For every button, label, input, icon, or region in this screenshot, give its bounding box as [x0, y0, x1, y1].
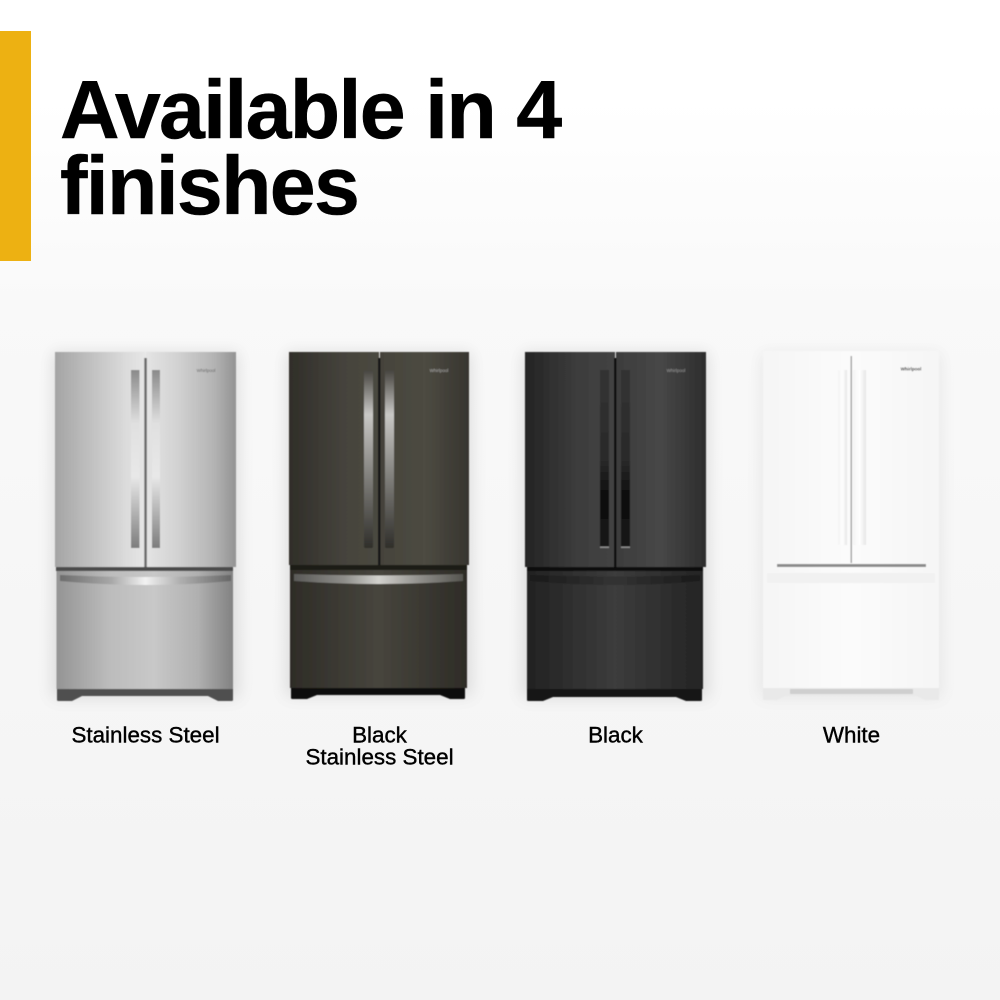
base feet — [291, 688, 465, 699]
panel: stainless steel fridge — [52, 352, 239, 701]
drawer handle — [530, 575, 700, 585]
label: black stainless steel — [305, 722, 454, 770]
left door — [55, 352, 145, 567]
brand logo: Whirlpool — [667, 368, 685, 373]
brand logo: Whirlpool — [197, 368, 215, 373]
divider band — [527, 567, 703, 571]
door seam — [144, 358, 147, 567]
drawer — [527, 571, 703, 689]
drawer — [290, 570, 467, 688]
divider band — [290, 565, 467, 570]
base feet — [527, 689, 702, 701]
base vent — [763, 688, 939, 700]
door handles — [600, 370, 630, 548]
door seam — [378, 358, 380, 565]
panel: black fridge — [522, 352, 709, 701]
body — [763, 351, 939, 688]
title: Available in 4 — [60, 64, 562, 156]
door handles — [364, 370, 394, 548]
panel: black stainless steel fridge — [286, 352, 472, 699]
right door — [380, 352, 469, 565]
panel: white fridge — [760, 351, 942, 700]
divider band — [777, 564, 926, 567]
label: white: White — [823, 722, 880, 748]
brand logo: Whirlpool — [430, 368, 448, 373]
right door — [146, 352, 236, 567]
left door — [525, 352, 615, 567]
door seam — [614, 358, 616, 567]
door handles — [838, 370, 866, 545]
drawer handle — [294, 574, 463, 584]
left door — [289, 352, 379, 565]
accent bar — [0, 31, 31, 261]
label: black stainless steel: Black — [352, 722, 408, 748]
drawer handle — [767, 573, 935, 583]
brand logo: Whirlpool — [901, 366, 921, 372]
label: stainless steel: Stainless Steel — [71, 722, 220, 748]
label: black stainless steel: Stainless Steel — [305, 744, 454, 770]
label: black: Black — [588, 722, 644, 748]
title — [60, 64, 562, 232]
base feet — [57, 689, 233, 701]
drawer — [56, 571, 233, 689]
drawer handle — [60, 575, 231, 585]
divider band — [56, 567, 233, 571]
right door — [616, 352, 706, 567]
door handles — [131, 370, 160, 548]
title: finishes — [60, 140, 358, 232]
door seam — [850, 356, 852, 563]
